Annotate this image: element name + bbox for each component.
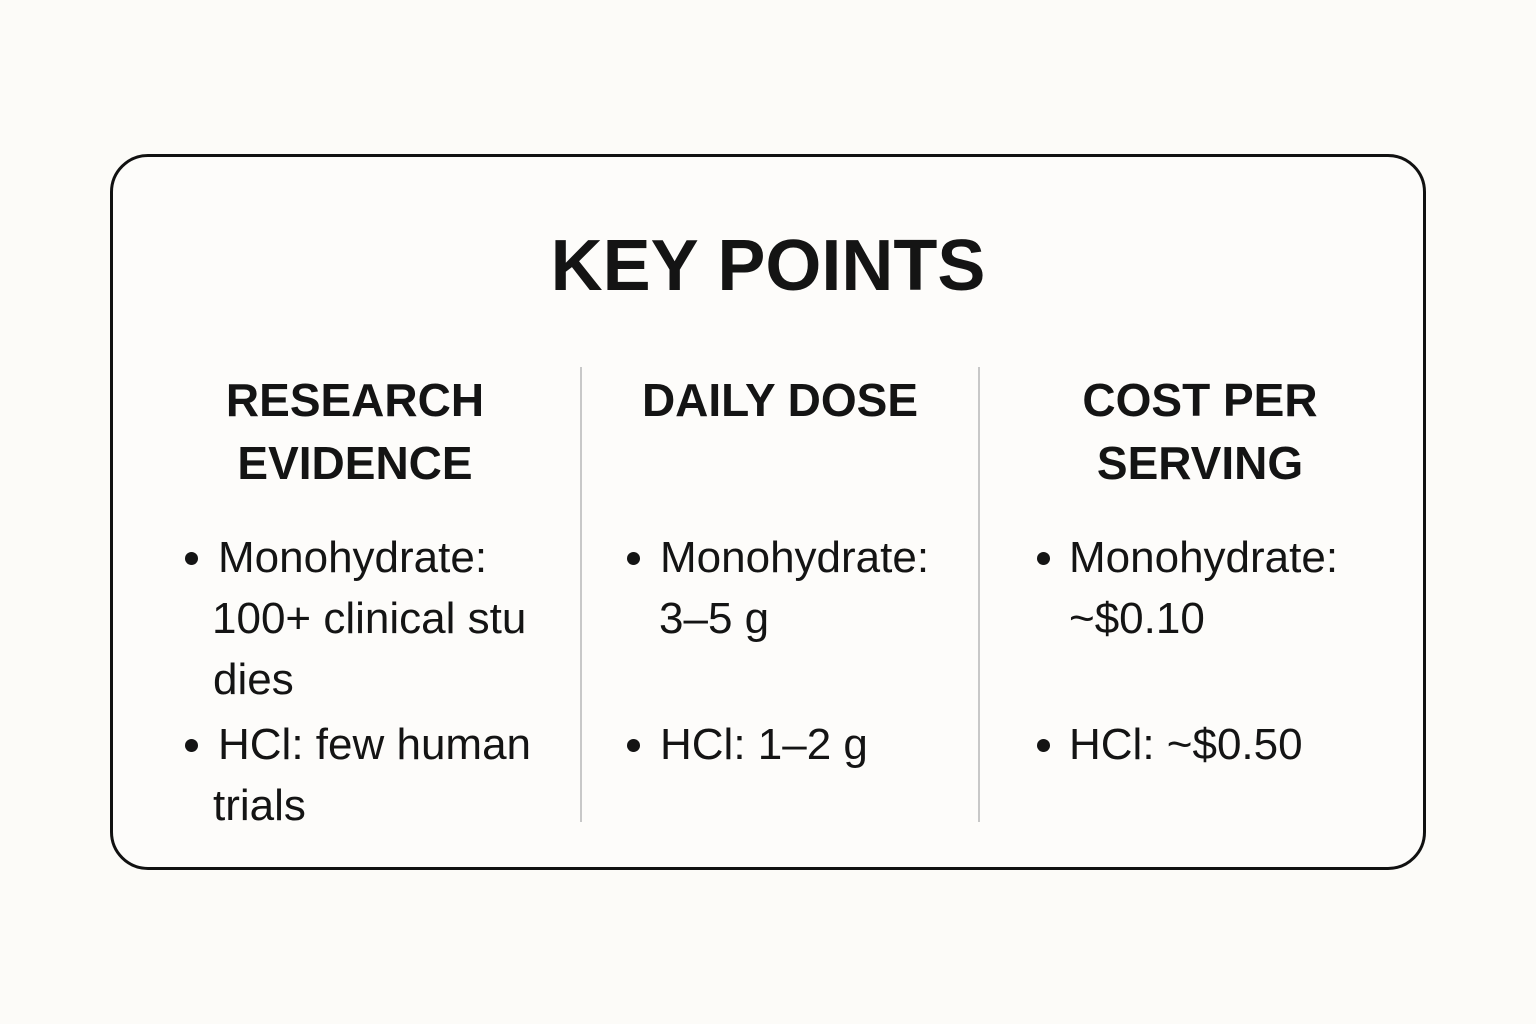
heading: research evidence: EVIDENCE [237,437,473,489]
heading: research evidence: RESEARCH [226,374,484,426]
bullet list: research [185,533,531,830]
column: cost per serving [1037,374,1338,769]
bullet list: cost [1037,533,1338,769]
bullet list: research: trials [213,781,306,830]
heading: cost per serving [1082,374,1318,489]
heading: cost per serving: COST PER [1082,374,1318,426]
heading: research evidence [226,374,484,489]
title: KEY POINTS [551,226,985,306]
bullet list: dose: 3–5 g [659,594,769,643]
bullet list: research: 100+ clinical stu [212,594,526,643]
panel: key points card [110,154,1426,870]
heading: cost per serving: SERVING [1097,437,1303,489]
column: daily dose [627,374,929,769]
bullet list: research: Monohydrate: [218,533,487,582]
bullet list: cost: HCl: ~$0.50 [1069,720,1303,769]
bullet list: dose: Monohydrate: [660,533,929,582]
bullet list: dose: HCl: 1–2 g [660,720,868,769]
heading: daily dose: DAILY DOSE [642,374,918,426]
bullet list: research: HCl: few human [218,720,531,769]
bullet list: research: dies [213,655,294,704]
bullet list: cost: Monohydrate: [1069,533,1338,582]
column: research evidence [185,374,531,830]
bullet list: dose [627,533,929,769]
bullet list: cost: ~$0.10 [1069,594,1205,643]
